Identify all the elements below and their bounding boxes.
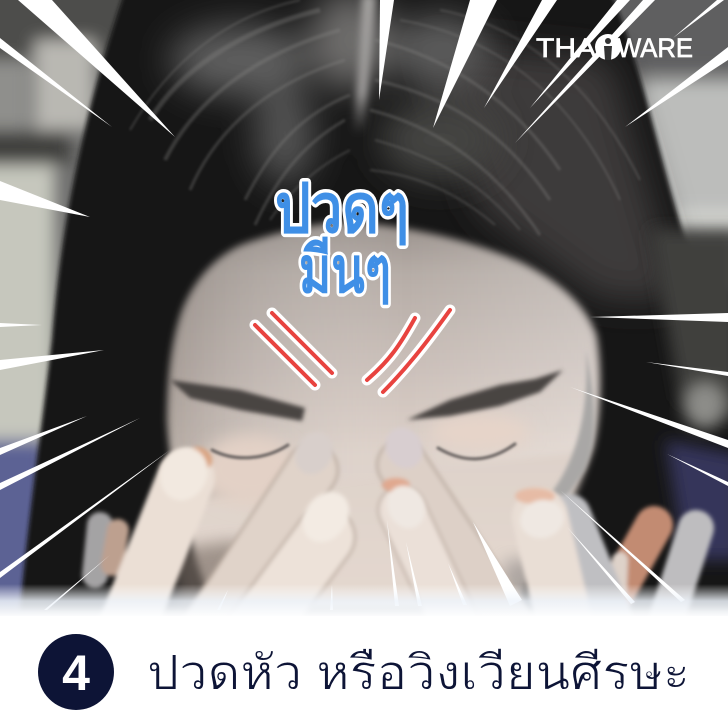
hair sheen strands [130, 0, 640, 235]
bottom caption panel [0, 584, 728, 728]
hair crown tone [170, 0, 500, 185]
face [168, 222, 599, 610]
right pain marks [367, 310, 450, 392]
logo icon [595, 34, 621, 60]
caption line 1: ปวดๆ [275, 171, 409, 247]
logo wordmark end: WARE [617, 33, 693, 63]
left-side back finger [95, 525, 100, 575]
heading: ปวดหัว หรือวิงเวียนศีรษะ [147, 647, 690, 700]
left pain marks [255, 313, 332, 385]
closed eyes [212, 444, 515, 459]
number badge [38, 634, 114, 710]
hair part [352, 0, 376, 135]
face side tone [168, 222, 599, 500]
number badge: 4 [62, 645, 90, 701]
fingers [540, 517, 566, 630]
eyebrows [170, 370, 563, 421]
hair right side tone [420, 40, 680, 300]
under-eye skin [200, 435, 300, 505]
hands [95, 465, 696, 635]
logo: Thaiware [536, 33, 693, 63]
pain marks [255, 310, 450, 392]
hand-written caption [275, 171, 409, 306]
caption line 2: มีนๆ [299, 234, 391, 306]
finger nails [152, 421, 568, 551]
right-side far fingers [612, 525, 654, 600]
eyelid tone [430, 414, 530, 450]
panel body [0, 616, 728, 728]
neck and cheek shadow [168, 540, 245, 610]
jaw strap [552, 350, 594, 500]
panel fade [0, 584, 728, 618]
logo wordmark: THA [536, 33, 596, 63]
